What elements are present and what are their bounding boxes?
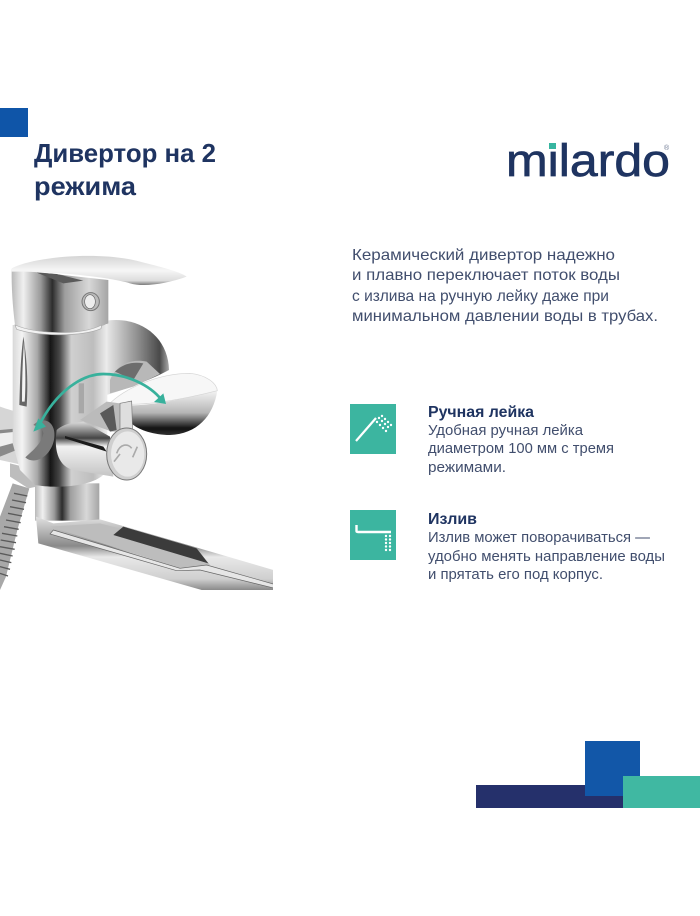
title (34, 138, 216, 201)
diverter tab (120, 400, 133, 429)
feature: spout text: удобно менять направление воды (428, 548, 665, 565)
back escutcheon (107, 320, 169, 395)
feature: hand shower text: режимами. (428, 459, 506, 476)
feature: spout text (428, 511, 665, 583)
intro text: Керамический дивертор надежно (352, 247, 615, 264)
icon: spout (350, 510, 396, 560)
feature: spout text: Излив может поворачиваться — (428, 529, 650, 546)
corner accent square (0, 108, 28, 137)
intro text: и плавно переключает поток воды (352, 267, 620, 284)
faucet illustration (0, 256, 273, 590)
intro text: минимальном давлении воды в трубах. (352, 308, 658, 325)
title: Дивертор на 2 (34, 138, 216, 168)
lever handle (12, 256, 187, 285)
feature: hand shower text: Ручная лейка (428, 404, 534, 421)
diverter knob (107, 428, 147, 480)
long spout (36, 517, 273, 590)
feature: spout text: Излив (428, 511, 477, 528)
logo: milardo: ® (664, 144, 670, 152)
decorative block group (476, 741, 700, 808)
title: режима (34, 171, 137, 201)
logo: milardo: milardo (506, 135, 670, 186)
feature: hand shower text (428, 404, 614, 476)
main body (13, 325, 107, 487)
arrow: teal arc (33, 374, 166, 432)
swivel ring (25, 420, 55, 460)
left arm (0, 406, 18, 464)
feature: hand shower text: Удобная ручная лейка (428, 422, 584, 439)
feature: hand shower text: диаметром 100 мм с тремя (428, 440, 614, 457)
spout bowl (110, 391, 217, 435)
intro text (352, 247, 658, 325)
feature: spout text: и прятать его под корпус. (428, 566, 603, 583)
diverter body (56, 422, 113, 477)
intro text: с излива на ручную лейку даже при (352, 288, 609, 305)
lower collar (35, 483, 99, 521)
icon: hand shower (350, 404, 396, 454)
top cap (12, 269, 108, 332)
hose (0, 483, 29, 590)
